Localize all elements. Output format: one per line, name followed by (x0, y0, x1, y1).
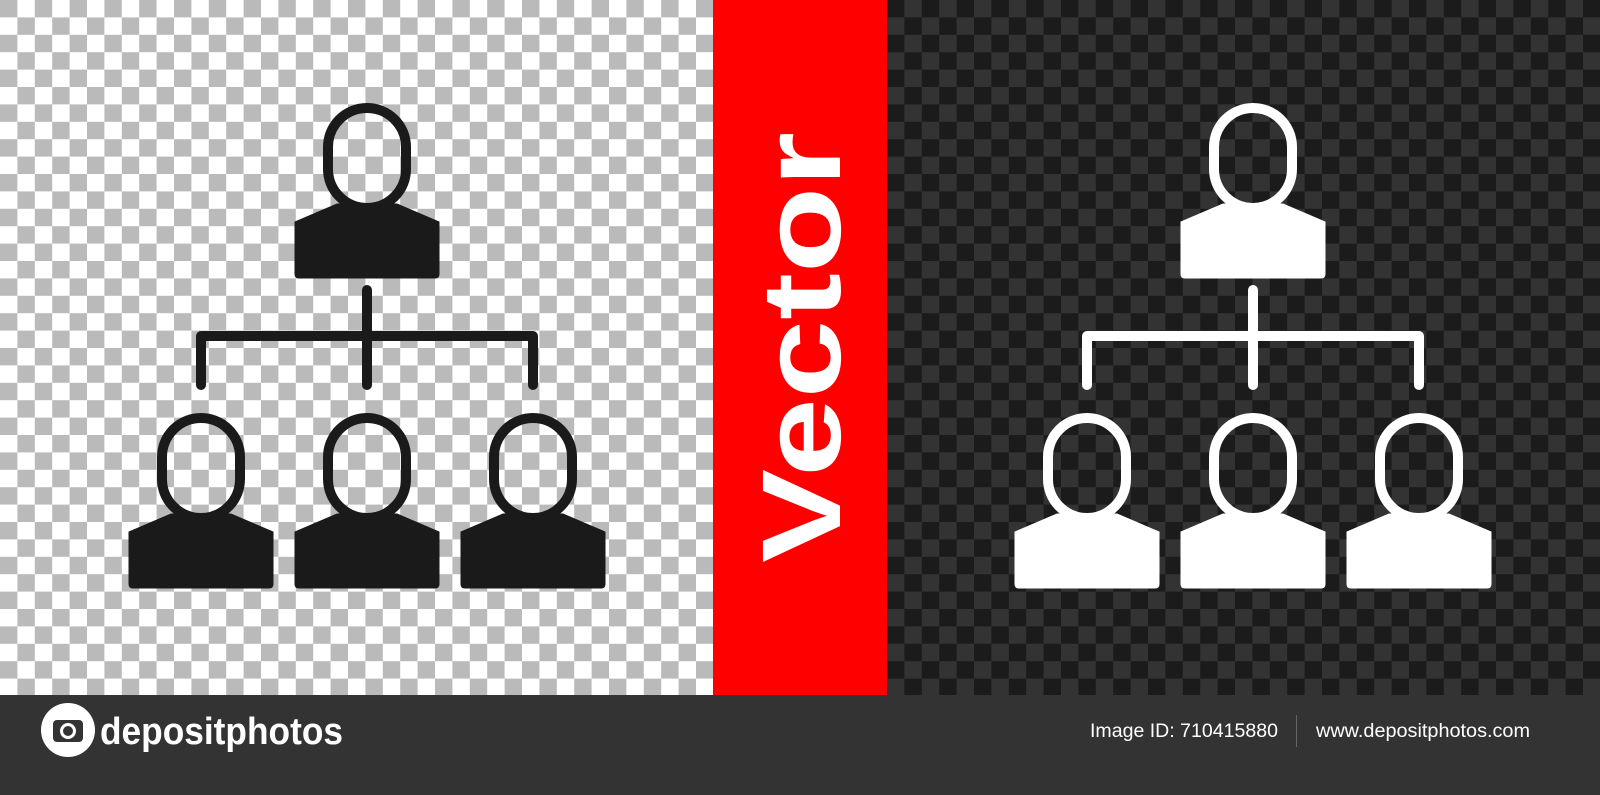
icon: white org chart (1015, 108, 1491, 588)
vertical text: Vector: Vector (739, 132, 864, 563)
icon: camera logo (41, 703, 95, 757)
website url: www.depositphotos.com (1315, 721, 1530, 742)
panel: red vector band (713, 0, 887, 695)
panel: light checker background (0, 0, 713, 695)
footer bar (0, 695, 1600, 795)
panel: dark checker background (887, 0, 1600, 695)
icon: black org chart (129, 108, 605, 588)
brand name: depositphotos (100, 711, 343, 753)
image id: Image ID: 710415880 (1090, 721, 1278, 742)
